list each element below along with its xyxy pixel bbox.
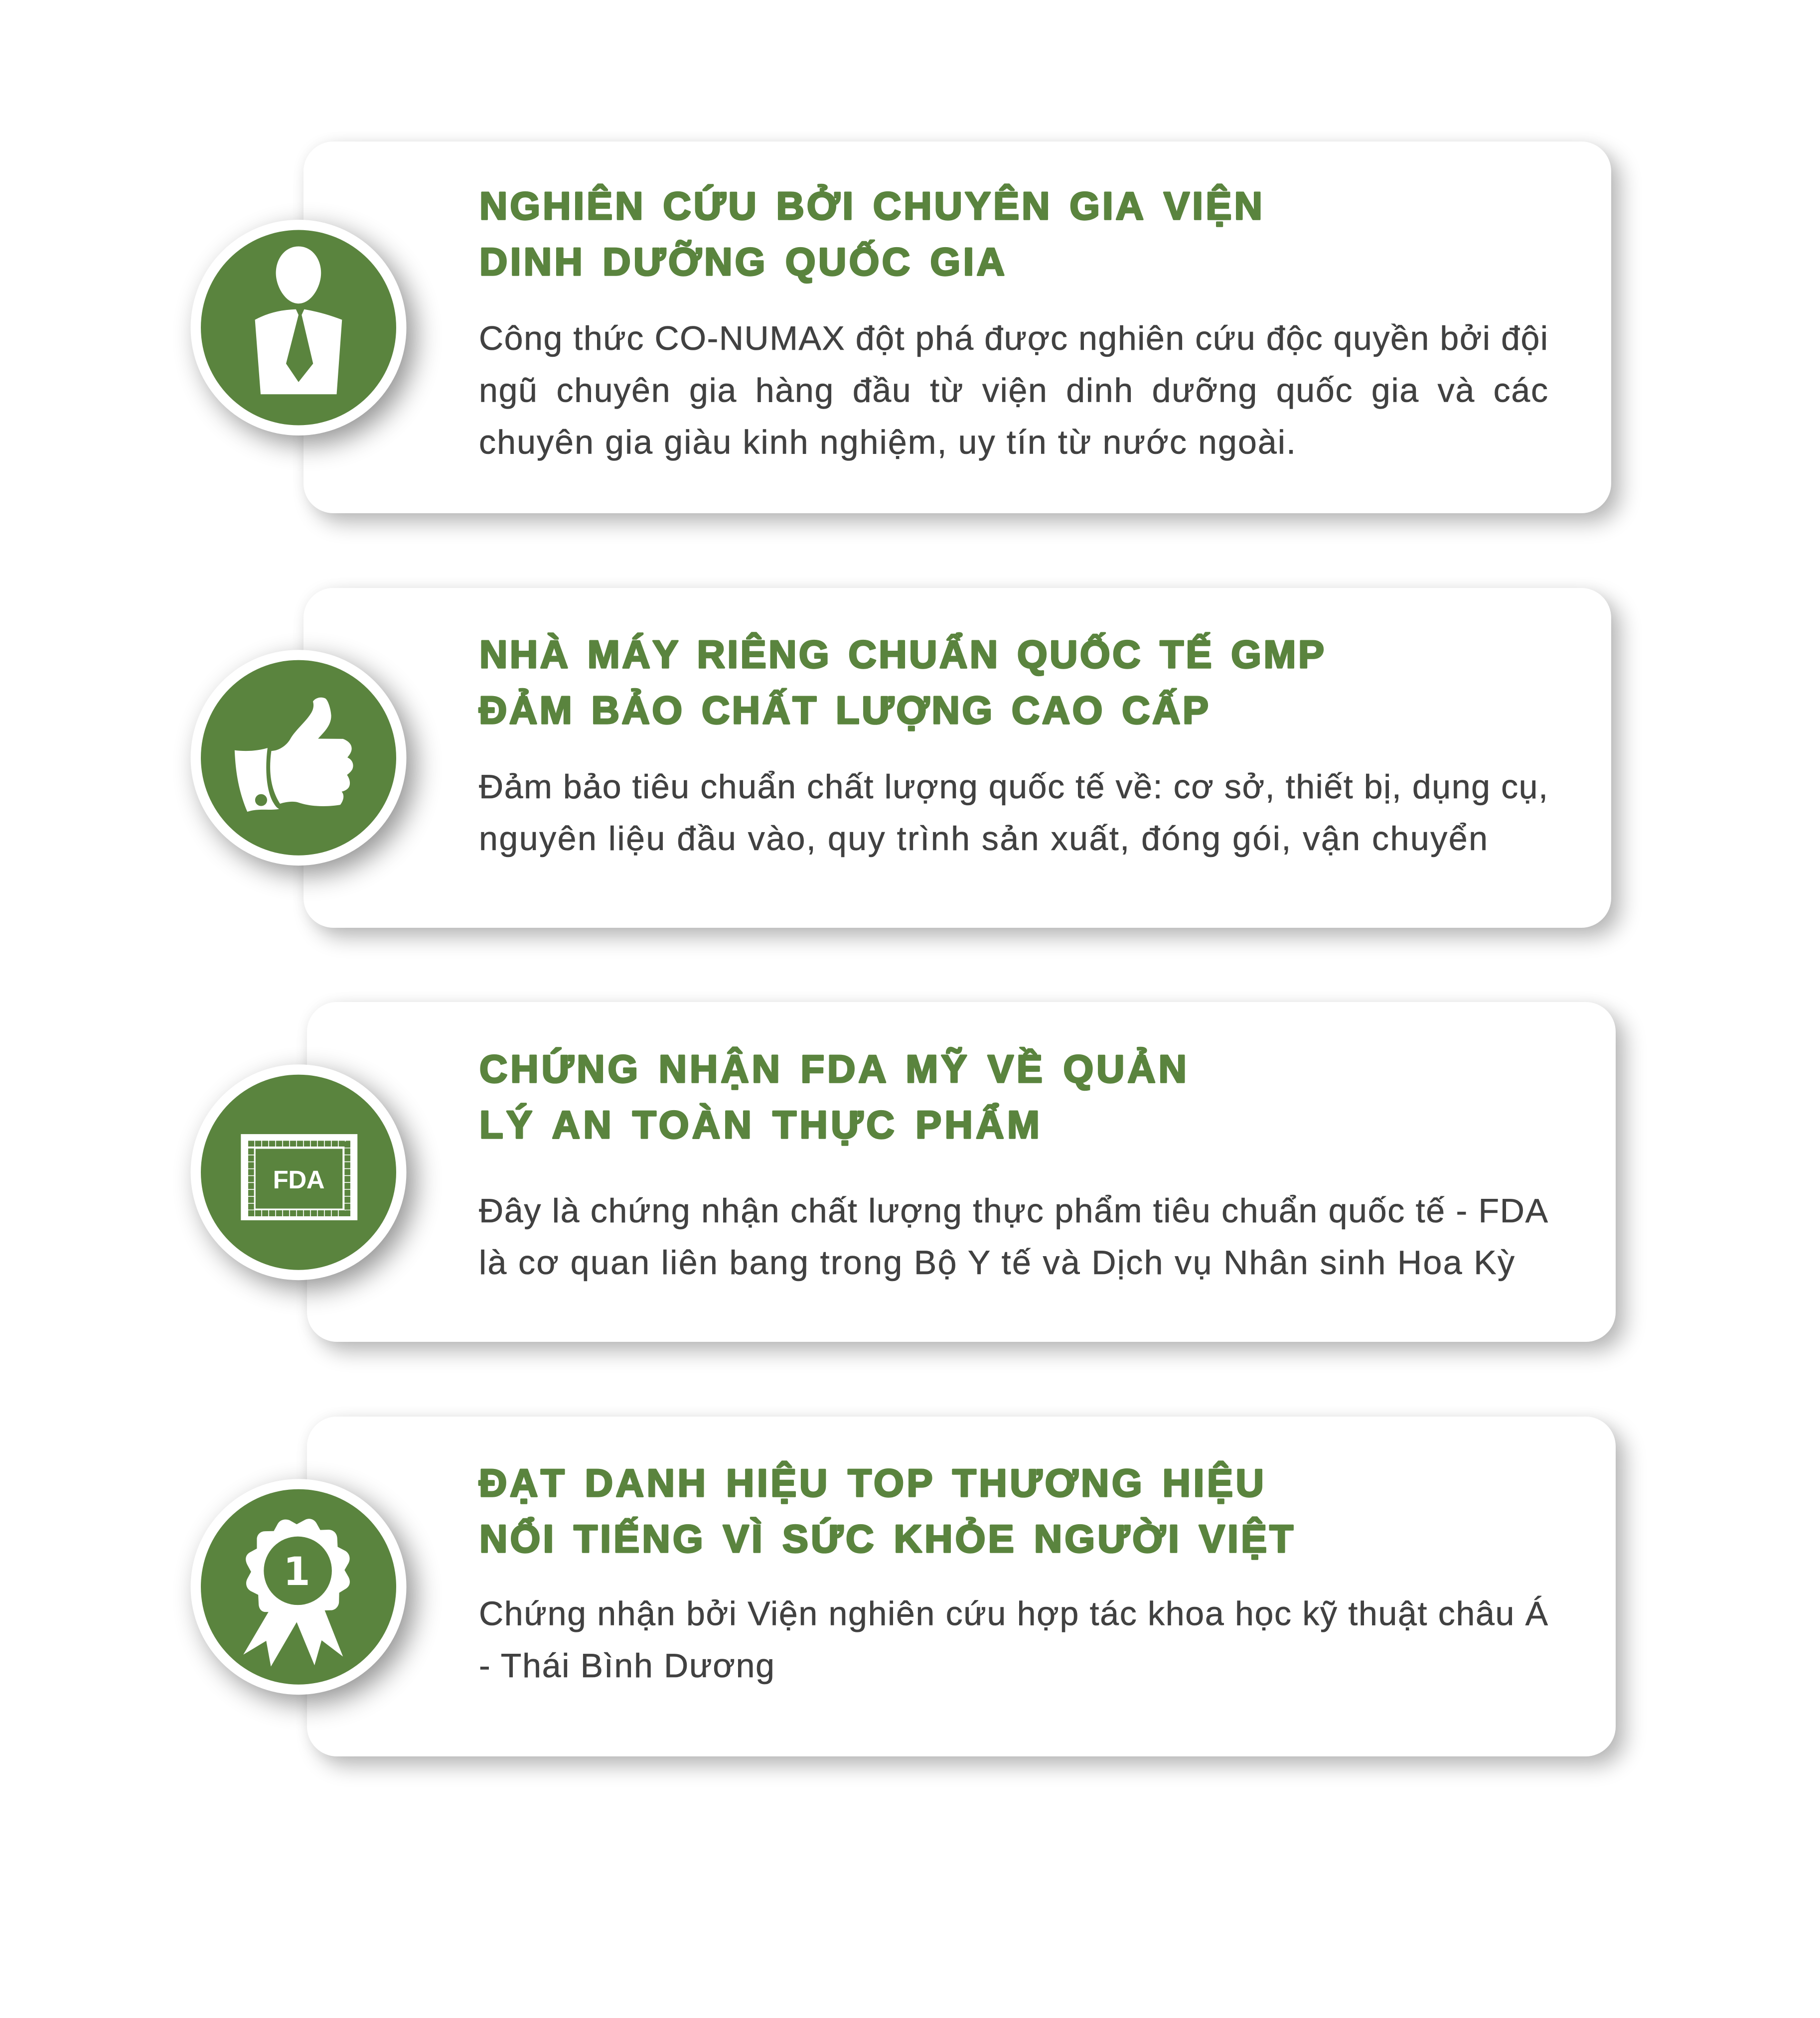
card 2 heading: NHÀ MÁY RIÊNG CHUẨN QUỐC TẾ GMP [479,632,1324,676]
card 2 body text: Đảm bảo tiêu chuẩn chất lượng quốc tế về: cơ sở, thiết bị, dụng cụ, [479,768,1548,806]
icon: expert in suit [190,220,407,435]
card 4 background [307,1417,1616,1756]
panel: card 2 GMP factory [303,588,1611,928]
icon: number one ribbon [190,1479,407,1695]
card 3 body text: Đây là chứng nhận chất lượng thực phẩm tiêu chuẩn quốc tế - FDA [479,1192,1548,1230]
card 1 body text: Công thức CO-NUMAX đột phá được nghiên cứu độc quyền bởi đội [479,319,1548,357]
card 4 heading: NỔI TIẾNG VÌ SỨC KHỎE NGƯỜI VIỆT [479,1517,1293,1561]
card 1 heading: NGHIÊN CỨU BỞI CHUYÊN GIA [479,184,1144,228]
card 1 heading: DINH DƯỠNG QUỐC GIA [479,240,1005,284]
card 2 body text: nguyên liệu đầu vào, quy trình sản xuất, đóng gói, vận chuyển [479,820,1488,858]
card 4 heading: ĐẠT DANH HIỆU TOP THƯƠNG HIỆU [479,1461,1264,1505]
card 1 background [303,142,1611,513]
panel: card 4 top brand [307,1417,1616,1756]
card 1 body text: ngũ chuyên gia hàng đầu từ viện dinh dưỡng quốc gia và các [479,372,1548,410]
card 4 body text: - Thái Bình Dương [479,1647,774,1685]
card 3 body text: là cơ quan liên bang trong Bộ Y tế và Dịch vụ Nhân sinh Hoa Kỳ [479,1244,1515,1282]
icon: FDA certificate [190,1064,407,1280]
icon: thumbs up [190,650,407,865]
panel: card 1 research [303,142,1611,513]
card 3 background [307,1002,1616,1342]
panel: card 3 FDA [307,1002,1616,1342]
card 1 heading: VIỆN [1164,184,1262,228]
icon: FDA certificate: FDA [273,1165,325,1194]
card 2 heading: ĐẢM BẢO CHẤT LƯỢNG CAO CẤP [479,688,1209,732]
card 4 body text: Chứng nhận bởi Viện nghiên cứu hợp tác khoa học kỹ thuật châu Á [479,1594,1548,1632]
card 3 heading: LÝ AN TOÀN THỰC PHẨM [479,1103,1040,1147]
icon: number one ribbon: 1 [283,1550,310,1594]
card 1 body text: chuyên gia giàu kinh nghiệm, uy tín từ nước ngoài. [479,424,1296,461]
card 3 heading: CHỨNG NHẬN FDA MỸ VỀ QUẢN [479,1047,1187,1091]
card 2 background [303,588,1611,928]
